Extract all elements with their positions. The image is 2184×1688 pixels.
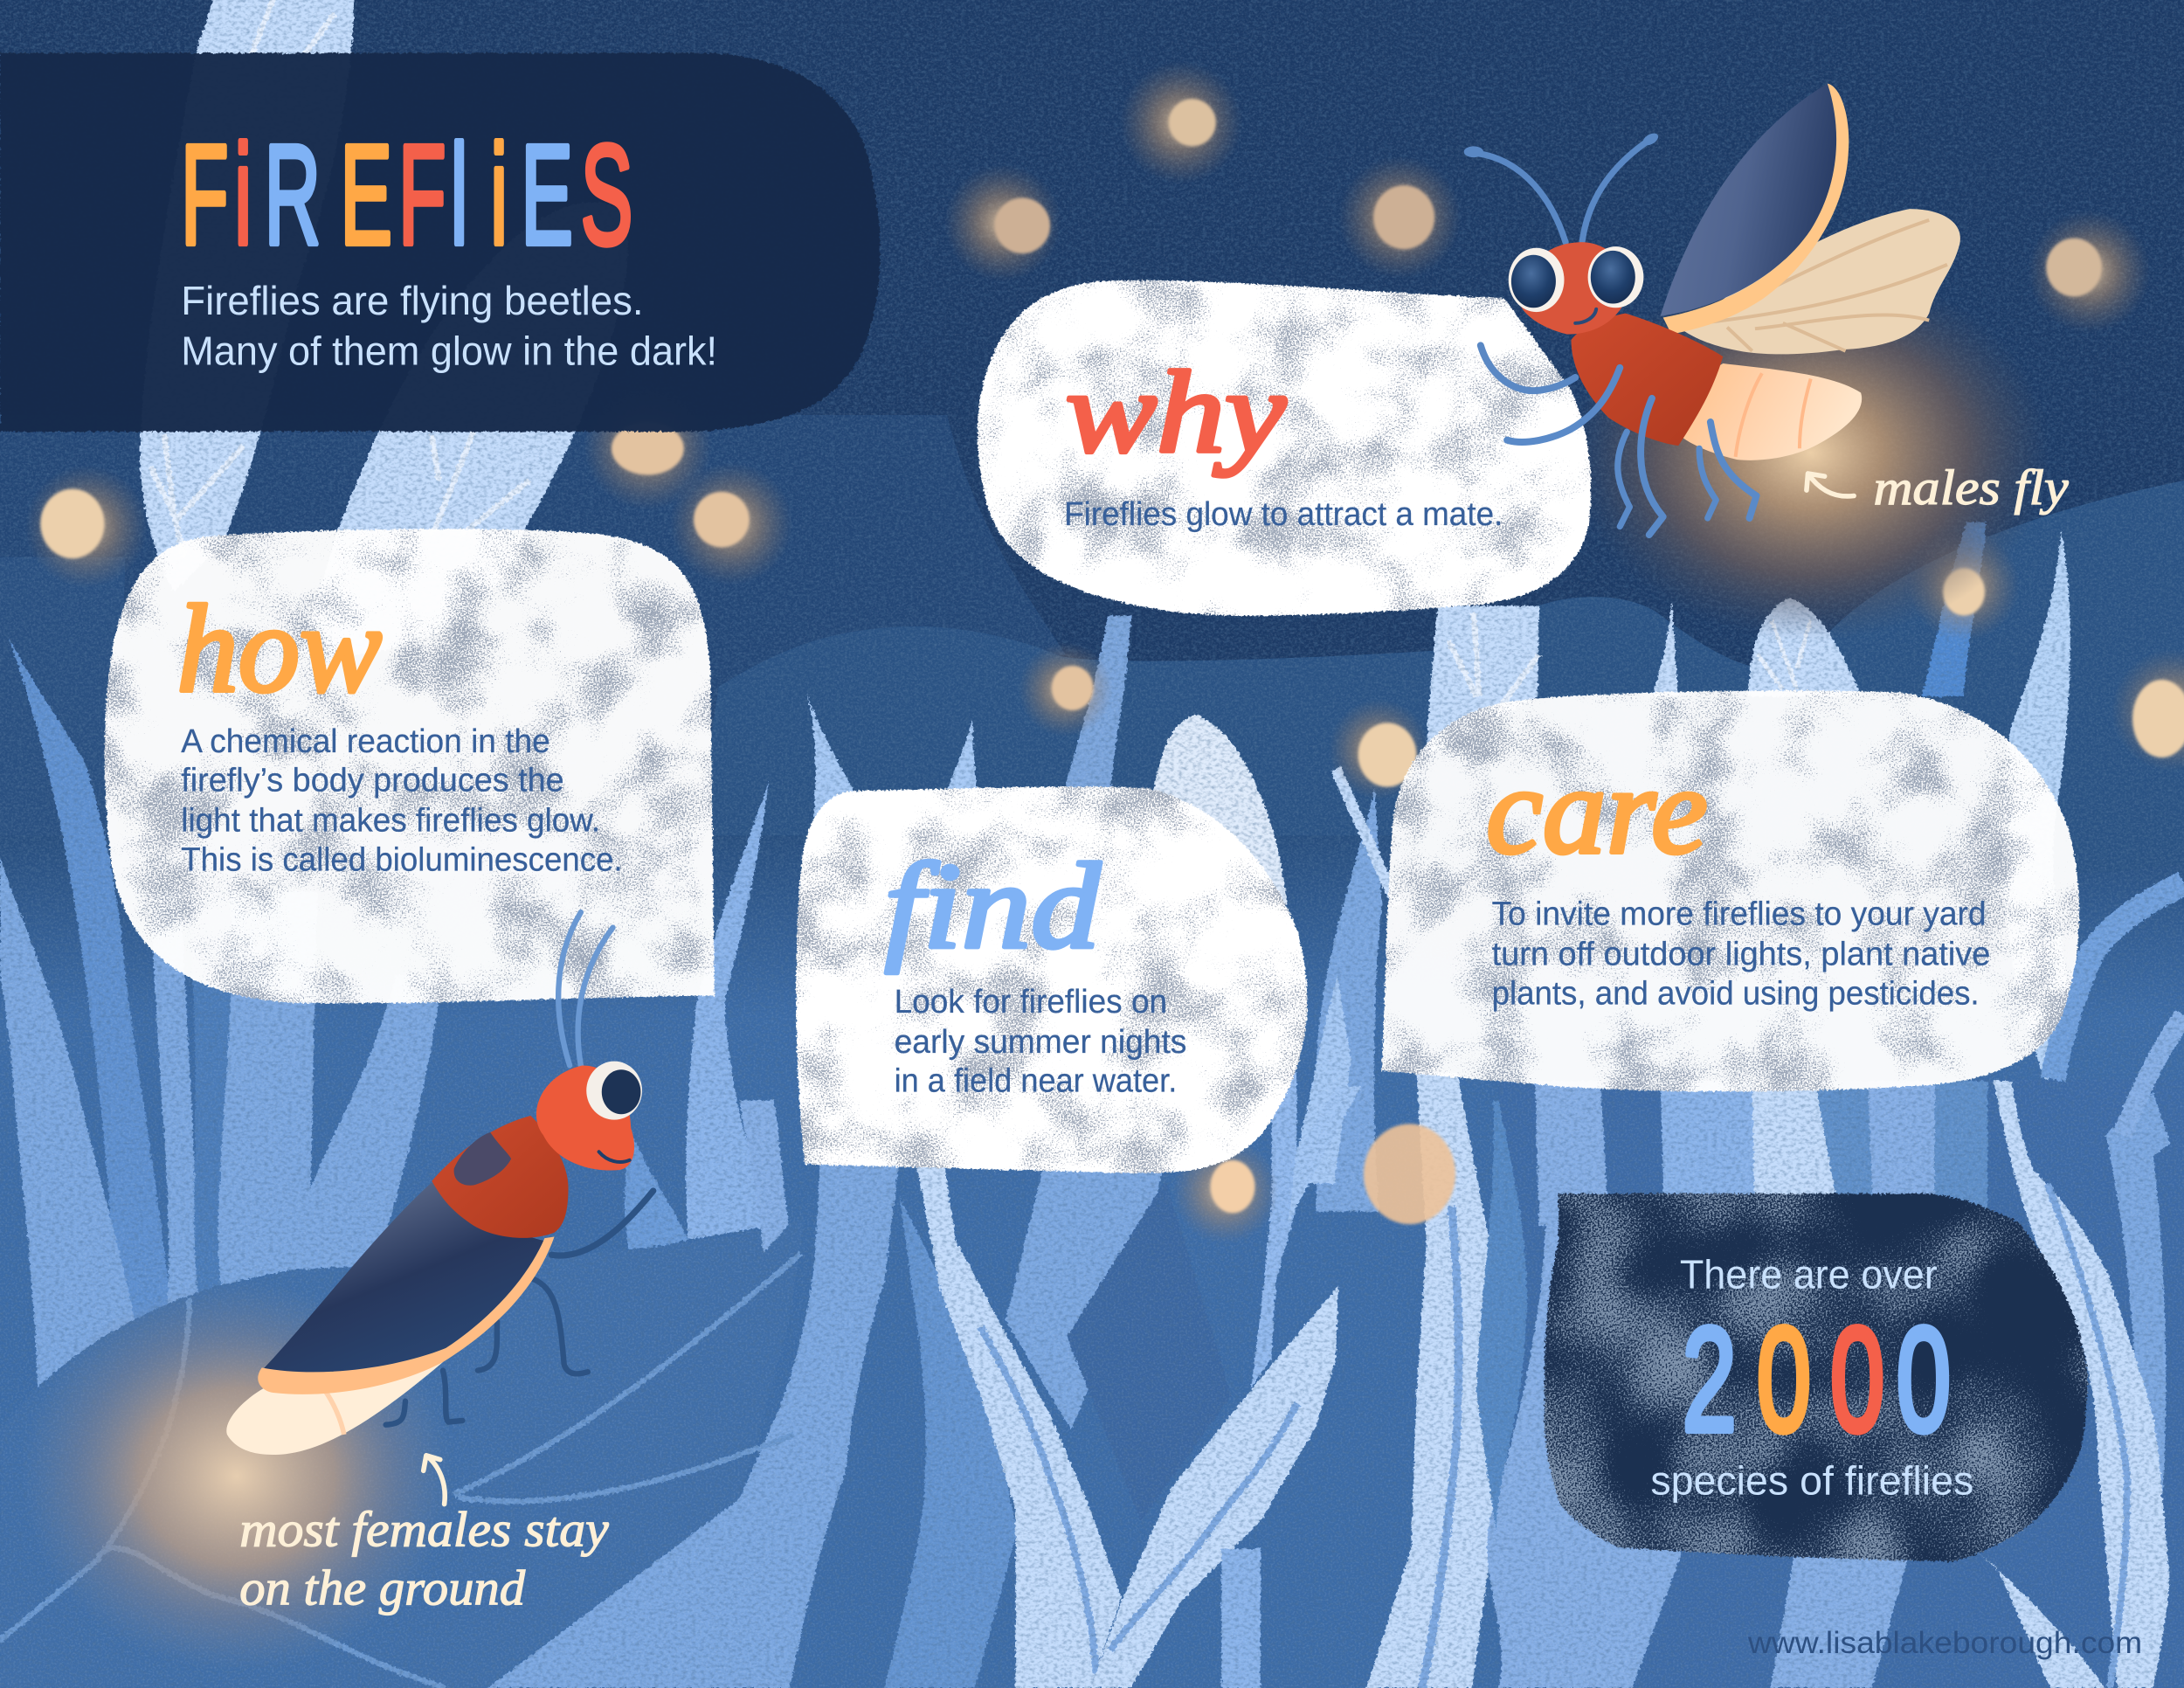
arm left [1481, 345, 1575, 391]
male glow [1571, 265, 2050, 640]
care text: turn off outdoor lights, plant native [1492, 936, 1990, 973]
how bubble [105, 529, 715, 1003]
why bubble [978, 280, 1591, 616]
eye left [1509, 248, 1564, 312]
leaf veins [0, 1254, 801, 1688]
far legs [386, 1191, 653, 1425]
dot 2 [944, 164, 1061, 281]
dot 1 [1120, 61, 1242, 183]
label: most females stay [239, 1502, 609, 1557]
head [536, 1065, 634, 1171]
big leaf under female [0, 1219, 804, 1688]
annotation: females: on the ground [239, 1560, 525, 1615]
heading: find: find [884, 839, 1102, 974]
leaf: rounded pale behind find [1151, 715, 1287, 905]
dot 6 [584, 382, 712, 509]
elytra [262, 1182, 544, 1373]
dot 9 [1329, 699, 1429, 799]
intro text: Many of them glow in the dark! [181, 329, 717, 374]
blade: left far [9, 638, 174, 1351]
blade: bright blue above care [1922, 522, 1987, 696]
care text [1492, 895, 1990, 1012]
blade: pale spike behind find [805, 692, 867, 905]
head [1518, 242, 1631, 335]
why text: Fireflies glow to attract a mate. [1064, 495, 1503, 533]
dot 10 [1908, 529, 2020, 640]
dot 12 [1364, 1124, 1455, 1224]
annotation: females [239, 1456, 609, 1615]
panel: why [978, 280, 1591, 616]
hind wing [1683, 209, 1960, 354]
title box [0, 53, 881, 432]
heading: why: why [1066, 347, 1286, 476]
dot 5 [25, 465, 148, 588]
heading: Fireflies: S [581, 115, 632, 274]
number 2000: 0 [1757, 1297, 1811, 1463]
leaf: second top [301, 202, 628, 656]
female firefly [226, 912, 653, 1455]
thorax [432, 1116, 569, 1238]
eye [586, 1062, 642, 1120]
text: species of fireflies: species of fireflies [1650, 1457, 1973, 1503]
heading: Fireflies: i [490, 115, 508, 274]
text: there are over: There are over [1680, 1252, 1938, 1297]
how text [181, 723, 623, 878]
find text: in a field near water. [895, 1062, 1177, 1100]
number 2000: 0 [1897, 1297, 1951, 1463]
how text: This is called bioluminescence. [181, 841, 623, 878]
dot 8 [1018, 642, 1113, 737]
blade: right of female [686, 781, 774, 1240]
glowing dots [25, 61, 2184, 1243]
right lower field [1476, 883, 2184, 1688]
how text: light that makes fireflies glow. [181, 802, 600, 840]
blade: light mid left [150, 891, 197, 1304]
heading: how: how [176, 580, 382, 719]
care bubble [1382, 691, 2079, 1091]
find text: early summer nights [895, 1023, 1186, 1061]
heading: Fireflies: F [398, 115, 446, 274]
heading: care: care [1486, 742, 1708, 881]
dot 11 [2111, 649, 2184, 771]
number 2000: 2 [1683, 1297, 1737, 1463]
panel: species count [1545, 1193, 2088, 1561]
arrow [424, 1456, 445, 1505]
smile [1575, 309, 1596, 323]
antennae [1464, 131, 1660, 242]
rim [258, 1237, 555, 1394]
how text: A chemical reaction in the [181, 723, 550, 760]
count box [1545, 1193, 2088, 1561]
intro text: Fireflies are flying beetles. [181, 278, 644, 323]
elytron rim [1663, 84, 1849, 335]
find text [895, 983, 1186, 1100]
abdomen [226, 1362, 443, 1455]
male firefly [1464, 84, 1960, 535]
female glow [21, 1282, 453, 1671]
bottom blades center [487, 1072, 1502, 1688]
heading: Fireflies: l [451, 115, 467, 274]
heading: Fireflies: E [521, 115, 573, 274]
blade: small spike [936, 720, 978, 821]
blade: spike pale [1652, 602, 1678, 696]
smile [599, 1152, 630, 1162]
how text: firefly’s body produces the [181, 761, 564, 799]
dot 7 [670, 462, 792, 585]
leaf: top left tall [140, 0, 354, 591]
find text: Look for fireflies on [895, 983, 1167, 1020]
leaf: behind why and care [1427, 605, 1539, 752]
panel: title [0, 53, 881, 432]
find bubble [796, 786, 1307, 1173]
dot 3 [1338, 156, 1462, 279]
blade: wedge behind female [625, 1135, 688, 1254]
heading: Fireflies: R [265, 115, 321, 274]
thorax [1571, 314, 1723, 446]
abdomen [1678, 363, 1862, 460]
heading: Fireflies: E [340, 115, 392, 274]
eye right [1588, 246, 1643, 308]
care text: To invite more fireflies to your yard [1492, 895, 1987, 932]
dot 4 [2028, 211, 2151, 333]
antennae [558, 912, 613, 1065]
blade: left low [0, 858, 135, 1393]
care text: plants, and avoid using pesticides. [1492, 974, 1980, 1012]
heading: Fireflies: F [181, 115, 229, 274]
arrow [1807, 474, 1854, 496]
panel: find [796, 786, 1307, 1173]
heading: Fireflies: i [234, 115, 252, 274]
elytron [1661, 84, 1836, 316]
far legs [1481, 345, 1716, 527]
panel: care [1382, 691, 2079, 1091]
blade: tall pale right [2002, 530, 2070, 1086]
leaf: rounded pale above care [1748, 598, 1861, 696]
label: males fly [1873, 460, 2069, 515]
annotation: males fly [1807, 460, 2069, 515]
website credit: www.lisablakeborough.com [1747, 1626, 2142, 1660]
blades: beside care left [1315, 788, 1382, 1212]
number 2000: 0 [1830, 1297, 1884, 1463]
blade: broad center left [218, 891, 443, 1287]
patch [454, 1132, 511, 1186]
intro text [181, 278, 717, 374]
panel: how [105, 529, 715, 1003]
blade: dark stripe [188, 891, 239, 1292]
dot 13 [1172, 1138, 1279, 1243]
blade: near why [1063, 616, 1131, 794]
near legs [1507, 368, 1757, 535]
